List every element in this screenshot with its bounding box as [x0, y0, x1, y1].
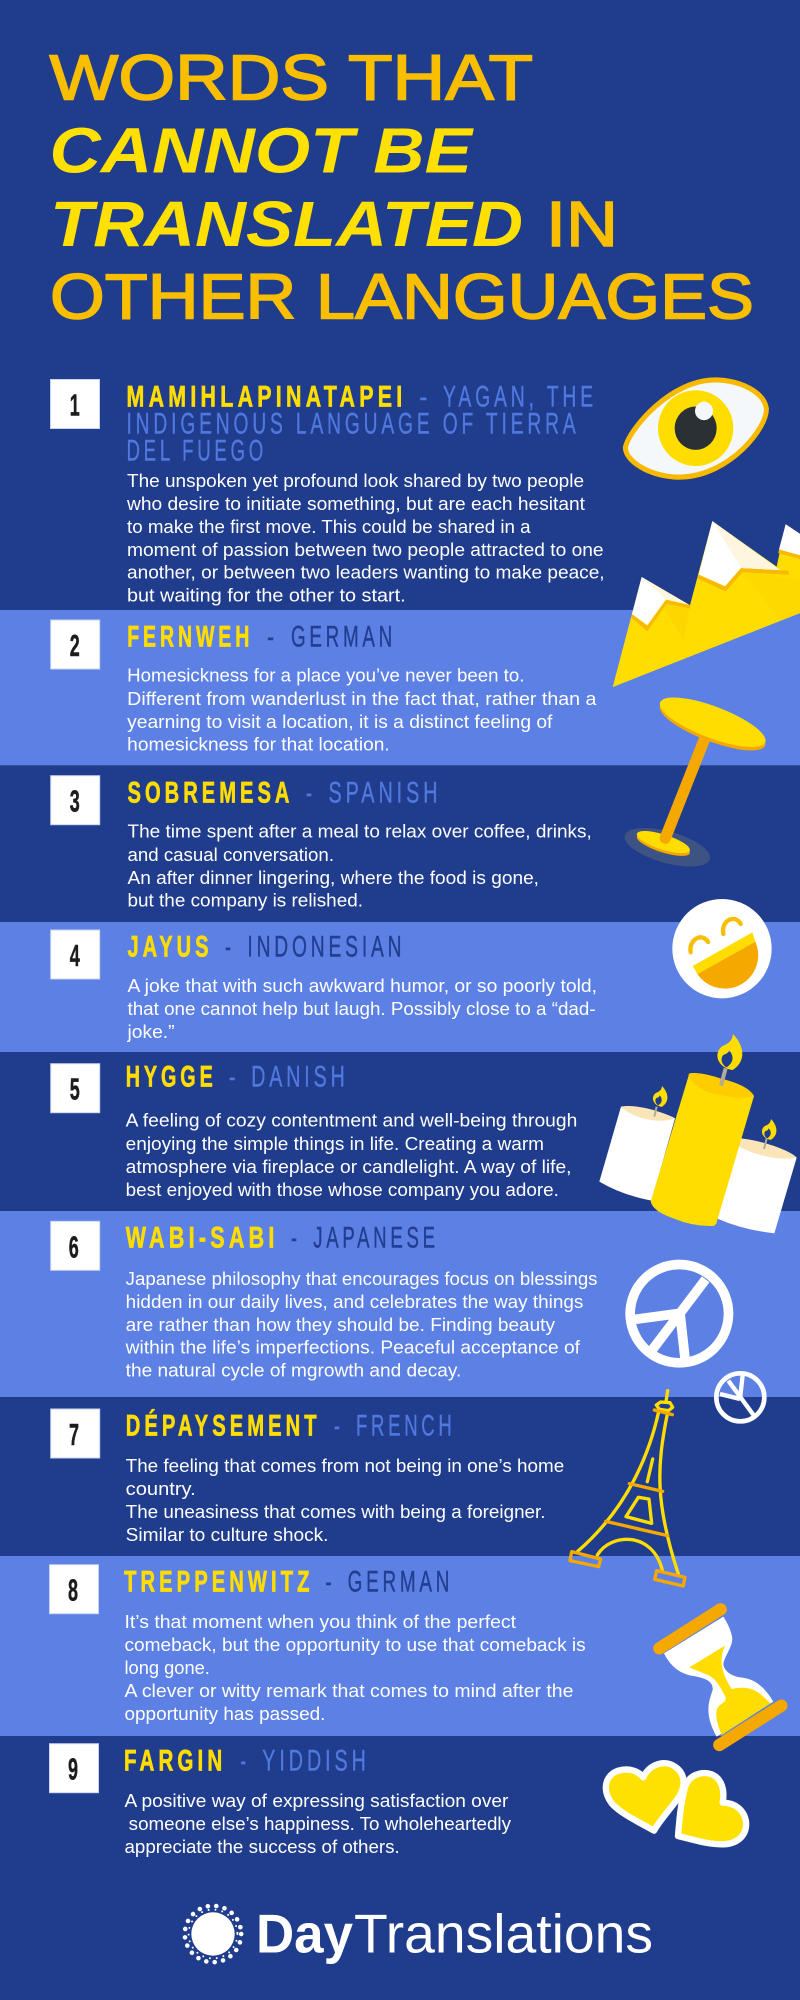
heading 6: -: [291, 1222, 297, 1255]
heading 2: GERMAN: [291, 621, 396, 654]
panel: item 2 fernweh: [0, 610, 800, 765]
heading 1: -: [419, 380, 427, 413]
logo wordmark: Translations: [354, 1903, 653, 1965]
body text 9: appreciate the success of others.: [124, 1836, 400, 1857]
number box 5: [51, 1064, 100, 1113]
heading 7: -: [334, 1410, 340, 1443]
icon: small peace sign: [716, 1373, 764, 1421]
icon: eiffel tower: [570, 1391, 685, 1586]
body text 6: Japanese philosophy that encourages focus on blessings: [126, 1268, 597, 1289]
number box 7: 7: [69, 1417, 79, 1452]
heading 1: [126, 380, 597, 468]
body text 1: The unspoken yet profound look shared by two people: [127, 470, 584, 491]
title: [50, 42, 754, 333]
number box 6: 6: [69, 1229, 79, 1264]
heading 4: JAYUS: [128, 931, 212, 964]
body text 1: another, or between two leaders wanting to make peace,: [127, 562, 605, 583]
body text 8: It’s that moment when you think of the perfect: [124, 1611, 516, 1632]
number box 9: [50, 1744, 98, 1793]
body text 3: The time spent after a meal to relax over coffee, drinks,: [128, 821, 592, 842]
heading 5: HYGGE: [126, 1061, 217, 1094]
body text 1: moment of passion between two people attracted to one: [127, 539, 604, 560]
heading 6: [126, 1222, 439, 1255]
number box 1: 1: [70, 387, 80, 422]
body text 9: someone else’s happiness. To wholeheartedly: [129, 1813, 512, 1834]
panel: item 3 sobremesa: [51, 776, 592, 911]
icon: hourglass: [659, 1609, 781, 1745]
number box 3: 3: [70, 784, 80, 819]
heading 9: FARGIN: [124, 1744, 226, 1777]
icon: eye: [625, 380, 766, 477]
body text 1: who desire to initiate something, but are each hesitant: [126, 493, 585, 514]
number box 4: 4: [70, 938, 80, 973]
body text 2: Homesickness for a place you’ve never been to.: [127, 665, 524, 686]
icon: laughing face: [672, 899, 772, 998]
number box 5: 5: [70, 1072, 80, 1107]
body text 9: [124, 1790, 512, 1857]
title: OTHER LANGUAGES: [50, 261, 754, 333]
logo wordmark: Day: [256, 1903, 353, 1965]
body text 3: but the company is relished.: [128, 890, 363, 911]
panel: item 6 wabi-sabi: [0, 1211, 800, 1397]
title: TRANSLATED: [50, 188, 523, 260]
icon: mountains: [613, 521, 800, 687]
body text 3: [128, 821, 592, 911]
panel: item 9 fargin: [50, 1744, 512, 1857]
logo sun icon: [185, 1906, 241, 1962]
icon: table: [621, 688, 771, 874]
heading 1: YAGAN, THE: [443, 380, 597, 413]
body text 1: to make the first move. This could be shared in a: [127, 516, 531, 537]
body text 5: best enjoyed with those whose company you adore.: [126, 1179, 559, 1200]
body text 4: [126, 975, 597, 1042]
heading 5: [126, 1061, 349, 1094]
heading 6: JAPANESE: [313, 1222, 439, 1255]
body text 2: yearning to visit a location, it is a distinct feeling of: [127, 711, 553, 732]
body text 8: opportunity has passed.: [124, 1703, 325, 1724]
number box 8: [50, 1565, 98, 1614]
body text 3: An after dinner lingering, where the food is gone,: [128, 867, 539, 888]
number box 7: [51, 1409, 100, 1458]
title: CANNOT BE: [50, 115, 475, 187]
number box 1: [50, 380, 100, 428]
heading 1: DEL FUEGO: [126, 434, 267, 468]
body text 8: [124, 1611, 586, 1724]
heading 8: GERMAN: [348, 1566, 453, 1599]
body text 6: are rather than how they should be. Finding beauty: [126, 1314, 556, 1335]
body text 6: the natural cycle of mgrowth and decay.: [126, 1360, 461, 1381]
heading 2: -: [267, 621, 274, 654]
heading 9: -: [240, 1744, 246, 1777]
body text 8: long gone.: [124, 1657, 210, 1678]
panel: item 4 jayus: [0, 922, 800, 1052]
body text 2: [127, 665, 597, 755]
body text 3: and casual conversation.: [128, 844, 334, 865]
number box 2: [51, 620, 100, 669]
body text 7: country.: [126, 1478, 196, 1499]
icon: hearts: [606, 1763, 746, 1844]
panel: item 7 depaysement: [51, 1409, 564, 1545]
body text 6: within the life’s imperfections. Peaceful acceptance of: [125, 1337, 581, 1358]
body text 2: homesickness for that location.: [127, 734, 390, 755]
heading 8: TREPPENWITZ: [124, 1566, 313, 1599]
body text 9: A positive way of expressing satisfaction over: [124, 1790, 508, 1811]
heading 4: [128, 931, 405, 964]
heading 4: -: [225, 931, 231, 964]
body text 4: A joke that with such awkward humor, or so poorly told,: [128, 975, 597, 996]
body text 5: atmosphere via fireplace or candlelight. A way of life,: [126, 1156, 571, 1177]
body text 5: enjoying the simple things in life. Creating a warm: [126, 1133, 544, 1154]
body text 7: The uneasiness that comes with being a foreigner.: [126, 1501, 545, 1522]
body text 6: hidden in our daily lives, and celebrates the way things: [126, 1291, 583, 1312]
heading 6: WABI-SABI: [126, 1222, 279, 1255]
heading 9: [124, 1744, 370, 1777]
heading 7: DÉPAYSEMENT: [126, 1409, 321, 1443]
heading 5: -: [229, 1061, 236, 1094]
panel: item 5 hygge: [51, 1061, 577, 1200]
body text 5: A feeling of cozy contentment and well-being through: [126, 1110, 577, 1131]
body text 7: Similar to culture shock.: [126, 1524, 328, 1545]
body text 8: comeback, but the opportunity to use that comeback is: [124, 1634, 586, 1655]
panel: item 1 mamihlapinatapei: [50, 380, 605, 606]
number box 8: 8: [68, 1573, 78, 1608]
body text 4: joke.”: [126, 1021, 174, 1042]
heading 3: SOBREMESA: [128, 776, 294, 809]
logo: Day Translations: [185, 1903, 653, 1965]
icon: candles: [599, 1034, 797, 1233]
body text 5: [126, 1110, 577, 1200]
body text 7: The feeling that comes from not being in one’s home: [126, 1455, 564, 1476]
title: WORDS THAT: [50, 42, 533, 114]
number box 9: 9: [68, 1752, 78, 1787]
body text 7: [126, 1455, 564, 1545]
body text 2: Different from wanderlust in the fact that, rather than a: [127, 688, 597, 709]
number box 2: 2: [70, 628, 80, 663]
body text 4: that one cannot help but laugh. Possibly close to a “dad-: [128, 998, 596, 1019]
icon: large peace sign: [630, 1264, 728, 1363]
heading 1: MAMIHLAPINATAPEI: [126, 380, 406, 413]
heading 7: FRENCH: [356, 1410, 456, 1443]
heading 8: -: [325, 1566, 332, 1599]
body text 1: but waiting for the other to start.: [127, 585, 406, 606]
number box 4: [51, 930, 100, 979]
heading 3: SPANISH: [328, 776, 442, 809]
heading 3: -: [306, 776, 312, 809]
title: IN: [546, 188, 618, 260]
number box 3: [51, 776, 100, 825]
heading 5: DANISH: [251, 1061, 349, 1094]
body text 6: [125, 1268, 597, 1381]
heading 9: YIDDISH: [262, 1744, 370, 1777]
body text 1: [126, 470, 605, 606]
heading 4: INDONESIAN: [247, 931, 405, 964]
heading 2: FERNWEH: [127, 621, 253, 654]
body text 8: A clever or witty remark that comes to mind after the: [124, 1680, 573, 1701]
panel: item 8 treppenwitz: [0, 1556, 800, 1736]
number box 6: [51, 1221, 100, 1270]
